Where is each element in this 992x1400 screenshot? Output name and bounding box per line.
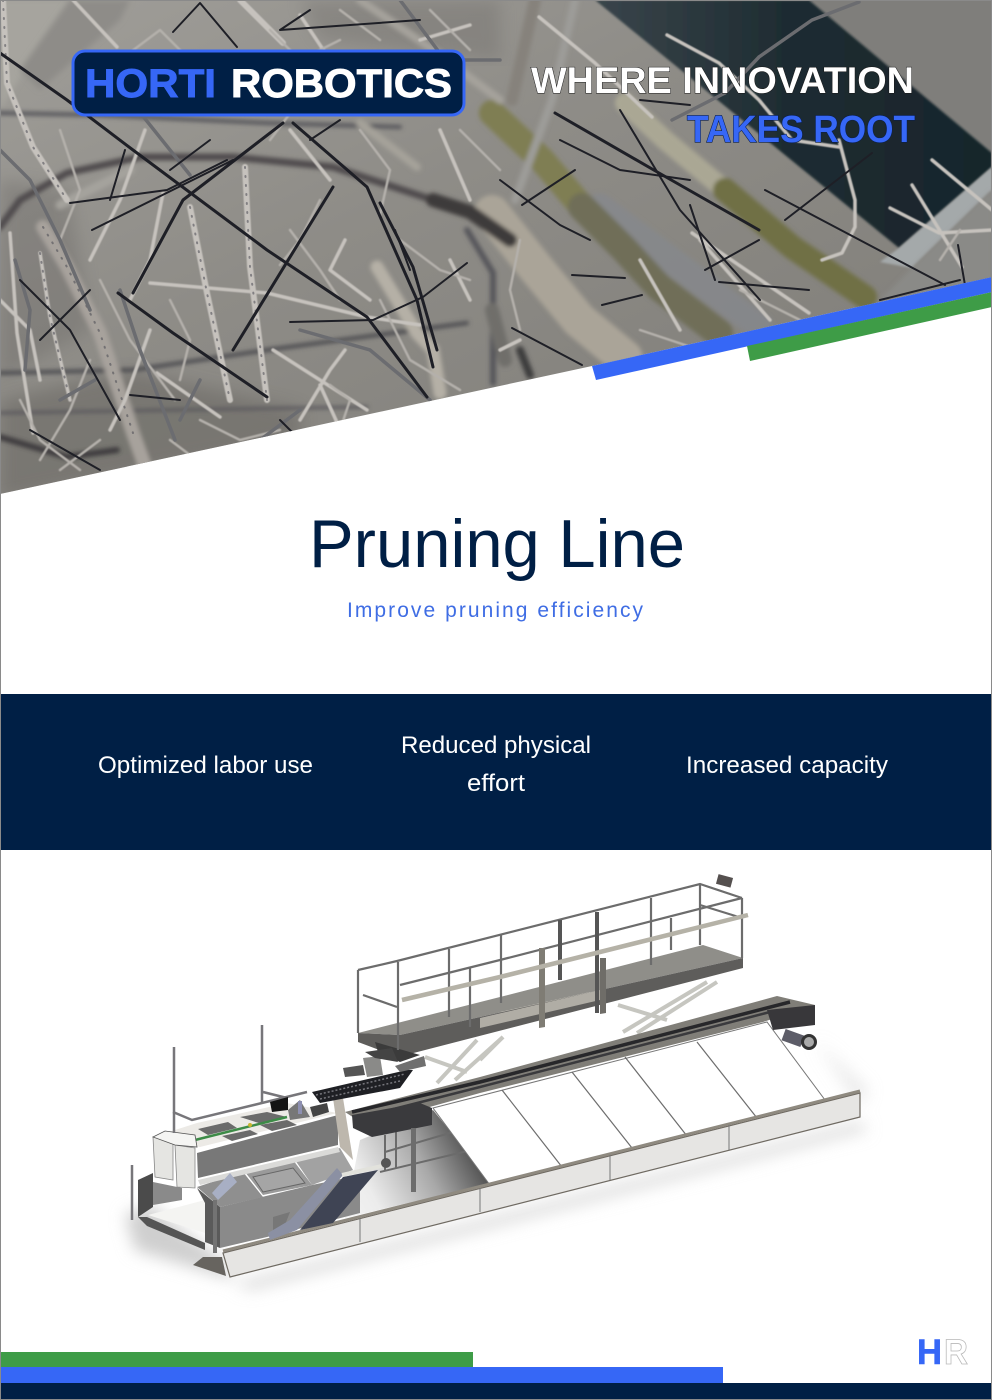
overhead conveyor beam bbox=[345, 996, 816, 1137]
benefit: physical effort: Reduced physical bbox=[401, 732, 591, 759]
HR monogram bbox=[917, 1333, 968, 1372]
outfeed chute bbox=[268, 1158, 391, 1240]
cabinets bbox=[153, 1131, 197, 1188]
chain conveyor and drive bbox=[270, 1048, 426, 1120]
benefit: labor: Optimized labor use bbox=[98, 752, 313, 779]
tagline: WHERE INNOVATION bbox=[531, 60, 914, 101]
footer stripe: navy bbox=[0, 1383, 992, 1399]
ground shadow bbox=[125, 1040, 868, 1290]
base rail bbox=[223, 1091, 860, 1277]
scissor lift bbox=[425, 982, 717, 1083]
tagline bbox=[531, 60, 915, 151]
green conveyor belt bbox=[195, 1117, 287, 1140]
benefit: physical effort: effort bbox=[467, 770, 525, 797]
platform bbox=[358, 874, 748, 1062]
sensor post bbox=[193, 1173, 237, 1276]
support post bbox=[411, 1128, 416, 1192]
left bin bbox=[138, 1173, 205, 1250]
tagline: TAKES ROOT bbox=[687, 109, 915, 151]
panel: benefits band bbox=[0, 694, 992, 850]
benefit: physical effort bbox=[401, 732, 591, 797]
accent stripe: green bbox=[747, 292, 992, 361]
under-panel frame and shadow bbox=[345, 1110, 492, 1218]
panel seams bbox=[502, 1042, 757, 1167]
footer stripe: blue bbox=[0, 1367, 723, 1383]
poles and guard rail bbox=[132, 1025, 307, 1220]
benefit: capacity: Increased capacity bbox=[686, 752, 888, 779]
logo badge: ROBOTICS bbox=[231, 62, 452, 106]
accent stripe: blue bbox=[592, 277, 992, 380]
header photo: pruned branches bbox=[0, 0, 992, 500]
logo badge: HORTI bbox=[85, 62, 216, 106]
HR monogram: H bbox=[917, 1333, 942, 1372]
HR monogram: R bbox=[944, 1333, 968, 1372]
subtitle: Improve pruning efficiency bbox=[347, 599, 644, 622]
logo badge bbox=[73, 51, 464, 115]
machine illustration: pruning line bbox=[125, 874, 868, 1290]
support frame bbox=[380, 1130, 480, 1172]
main cutting unit housing bbox=[153, 1098, 360, 1248]
title: Pruning Line bbox=[309, 506, 685, 582]
footer stripe: green bbox=[0, 1352, 473, 1367]
white sloped panels bbox=[433, 1022, 825, 1185]
